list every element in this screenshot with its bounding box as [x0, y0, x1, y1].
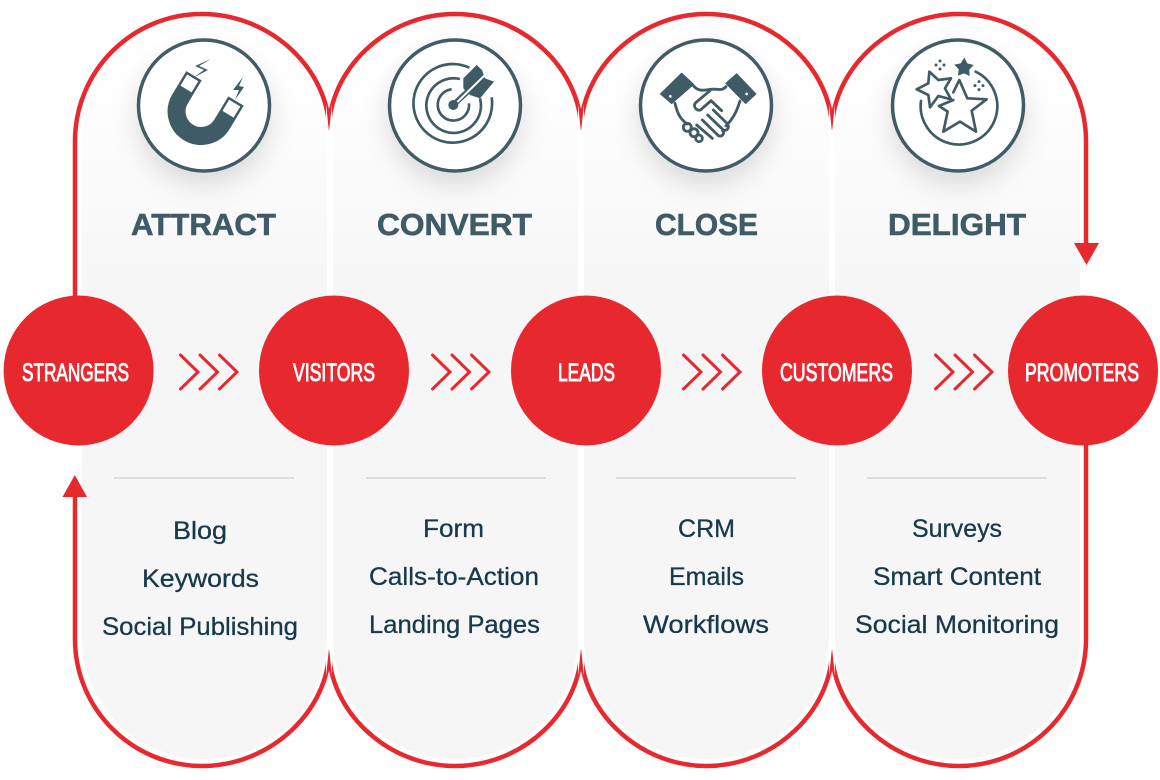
- icon: handshake: [640, 40, 772, 171]
- heading: close: CLOSE: [655, 207, 758, 242]
- list: close tools: CRM: [678, 515, 735, 543]
- icon: stars: [892, 40, 1024, 171]
- stage: strangers: STRANGERS: [22, 359, 129, 387]
- list: convert tools: Landing Pages: [369, 611, 540, 639]
- list: close tools: [643, 515, 769, 639]
- heading: convert: CONVERT: [377, 207, 532, 242]
- heading: attract: ATTRACT: [131, 207, 276, 242]
- list: convert tools: [369, 515, 540, 639]
- arrow: into strangers: [62, 475, 87, 497]
- list: delight tools: Smart Content: [873, 563, 1041, 591]
- stage: customers: [762, 296, 912, 446]
- list: convert tools: Form: [423, 515, 484, 543]
- panel: delight background: [835, 19, 1080, 759]
- icon: magnet: [138, 40, 270, 171]
- stage: visitors: VISITORS: [293, 359, 375, 387]
- panel: convert background: [333, 19, 578, 759]
- list: attract tools: Blog: [173, 517, 227, 545]
- panel: close background: [584, 19, 829, 759]
- list: delight tools: Social Monitoring: [855, 611, 1059, 639]
- stage: visitors: [259, 296, 409, 446]
- panel: attract background: [82, 19, 327, 759]
- chevrons: visitors to leads: [432, 355, 489, 389]
- stage: strangers: [4, 296, 154, 446]
- chevrons: strangers to visitors: [180, 355, 237, 389]
- list: close tools: Workflows: [643, 611, 769, 639]
- chevrons: customers to promoters: [936, 355, 992, 389]
- list: close tools: Emails: [669, 563, 744, 591]
- list: attract tools: Keywords: [142, 565, 259, 593]
- stage: leads: [511, 296, 661, 446]
- arrow: into promoters: [1074, 243, 1099, 265]
- stage: customers: CUSTOMERS: [780, 359, 893, 387]
- icon: target with arrow: [390, 40, 520, 171]
- stage: leads: LEADS: [558, 359, 615, 387]
- stage: promoters: [1008, 296, 1158, 446]
- heading: delight: DELIGHT: [888, 207, 1026, 242]
- list: delight tools: Surveys: [912, 515, 1002, 543]
- list: delight tools: [855, 515, 1059, 639]
- list: attract tools: Social Publishing: [102, 613, 298, 641]
- list: convert tools: Calls-to-Action: [369, 563, 539, 591]
- chevrons: leads to customers: [684, 355, 740, 389]
- list: attract tools: [102, 517, 298, 641]
